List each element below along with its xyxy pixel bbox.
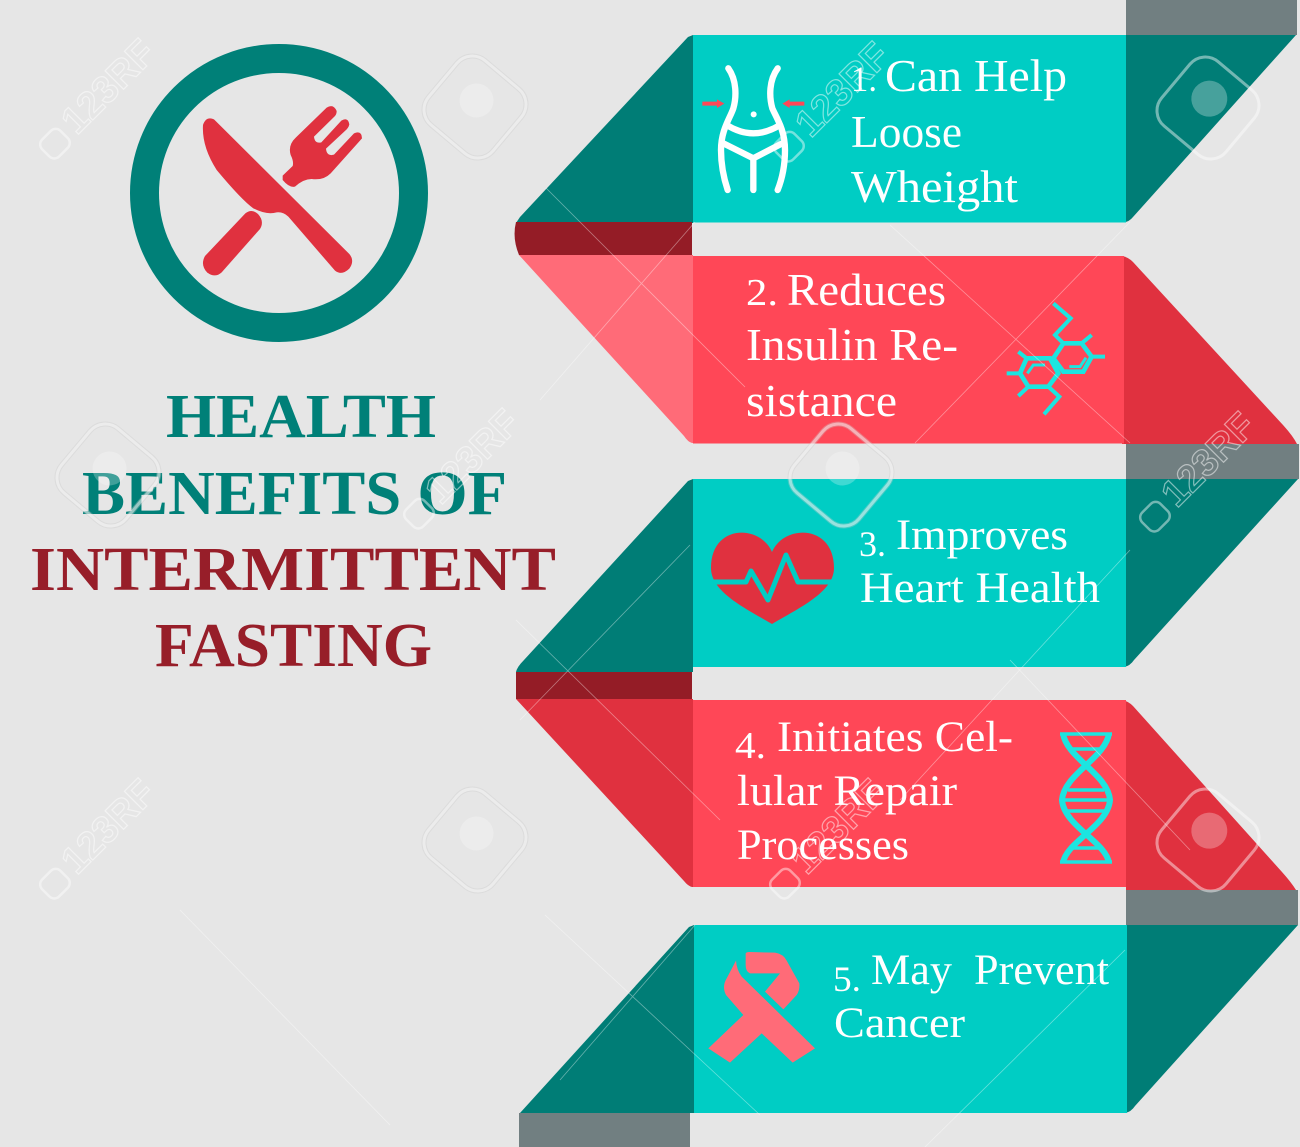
title: FASTING xyxy=(155,612,432,680)
watermarks: 123RF xyxy=(418,402,528,512)
watermarks: 123RF xyxy=(54,32,164,142)
text: benefit 4: Processes xyxy=(737,822,909,869)
text: benefit 2: 2. xyxy=(746,272,778,314)
text: benefit 3: 3. xyxy=(859,524,886,564)
text: benefit 4: 4. xyxy=(735,725,766,767)
text: benefit 3: Improves xyxy=(896,512,1068,559)
text: benefit 4: Initiates Cel- xyxy=(777,714,1013,761)
panel: benefit 5 xyxy=(520,925,1298,1113)
ribbon band 1 xyxy=(693,35,1126,222)
text: benefit 1: Loose xyxy=(851,106,962,157)
text: benefit 1: Wheight xyxy=(851,161,1018,212)
ribbon right fold 5 xyxy=(1125,925,1298,1113)
text: benefit 5: 5. xyxy=(833,959,861,999)
ribbon left fold 3 xyxy=(516,479,693,672)
text: benefit 4 xyxy=(735,714,1013,869)
icon: awareness ribbon xyxy=(708,952,815,1063)
ribbon band 2 xyxy=(693,256,1124,444)
title: BENEFITS OF xyxy=(82,460,507,528)
ribbon right fold 3 xyxy=(1124,479,1298,667)
watermarks: 123RF xyxy=(54,772,164,882)
title: INTERMITTENT xyxy=(30,536,556,604)
ribbon left fold 2 xyxy=(519,255,693,443)
text: benefit 5 xyxy=(833,947,1109,1047)
panel: benefit 1 xyxy=(516,35,1296,223)
icon: molecule xyxy=(1007,303,1105,414)
ribbon left fold 1 xyxy=(516,35,693,223)
ribbon band 3 xyxy=(693,479,1126,667)
connector: dark red fold 1 xyxy=(515,222,692,255)
text: benefit 1 xyxy=(851,50,1067,212)
panel: benefit 4 xyxy=(516,699,1296,890)
ribbon left fold 4 xyxy=(516,699,693,887)
watermarks: 123RF xyxy=(784,772,894,882)
title xyxy=(30,383,556,680)
connector: dark red fold 2 xyxy=(516,672,692,699)
watermarks: 123RF xyxy=(1154,405,1264,515)
text: benefit 2: Insulin Re- xyxy=(746,319,958,370)
icon: plate with knife and fork xyxy=(144,58,414,328)
panel: benefit 2 xyxy=(519,255,1297,444)
ribbon right fold 2 xyxy=(1122,256,1297,444)
ribbon right fold 1 xyxy=(1124,35,1296,222)
ribbon band 4 xyxy=(693,700,1126,887)
watermarks: 123RF xyxy=(788,35,898,145)
text: benefit 1: Can Help xyxy=(885,50,1067,101)
icon: DNA helix xyxy=(1060,733,1112,863)
text: benefit 2: sistance xyxy=(746,375,897,426)
panel: benefit 3 xyxy=(516,479,1298,672)
text: benefit 3: Heart Health xyxy=(860,565,1100,612)
text: benefit 2: Reduces xyxy=(787,264,946,315)
text: benefit 1: 1. xyxy=(851,59,877,99)
text: benefit 5: May Prevent xyxy=(871,947,1109,994)
icon: heart with pulse xyxy=(710,533,834,624)
panel: grey fold 3 xyxy=(1126,890,1298,925)
text: benefit 3 xyxy=(859,512,1100,612)
ribbon band 5 xyxy=(694,925,1127,1113)
title: HEALTH xyxy=(166,383,436,451)
text: benefit 4: lular Repair xyxy=(737,768,957,815)
icon: waist xyxy=(702,68,804,190)
ribbon left fold 5 xyxy=(520,925,694,1113)
panel: top grey fold xyxy=(1126,0,1297,35)
text: benefit 2 xyxy=(746,264,958,426)
text: benefit 5: Cancer xyxy=(834,1000,965,1047)
ribbon right fold 4 xyxy=(1122,700,1296,890)
panel: grey fold 2 xyxy=(1126,444,1299,479)
panel: bottom grey fold xyxy=(519,1113,690,1147)
